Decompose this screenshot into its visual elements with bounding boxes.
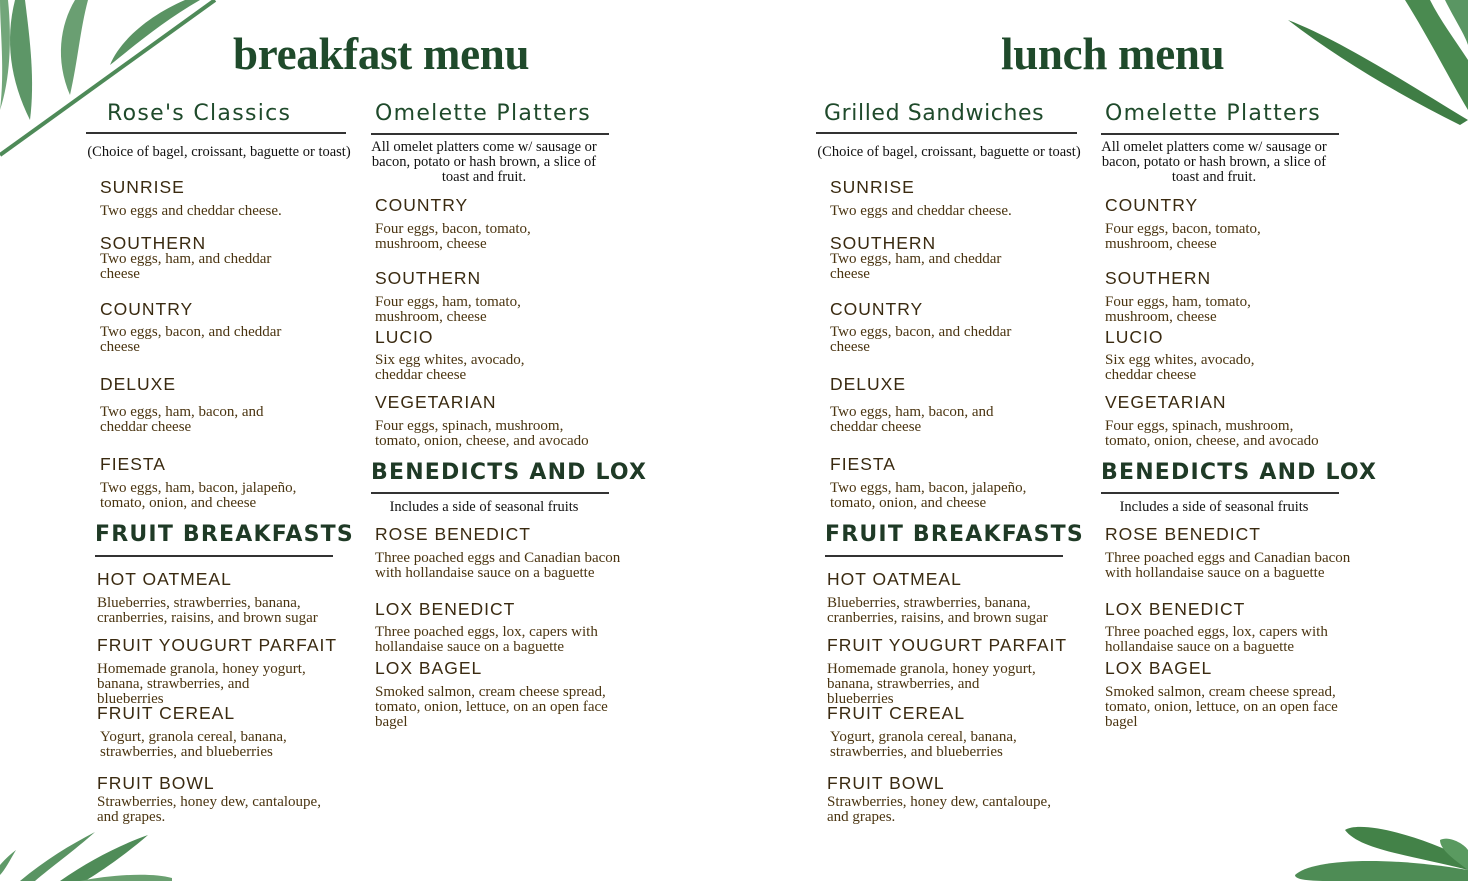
item: rose benedict: with hollandaise sauce on a baguette <box>375 565 595 581</box>
item: hot oatmeal: HOT OATMEAL <box>97 569 232 589</box>
item: rose benedict: Three poached eggs and Canadian bacon <box>1105 550 1350 566</box>
item: lox benedict <box>375 599 598 655</box>
item: deluxe: cheddar cheese <box>100 419 191 435</box>
item: southern: SOUTHERN <box>100 233 206 253</box>
item: southern: cheese <box>830 266 870 282</box>
item: country omelette: COUNTRY <box>1105 195 1198 215</box>
item: country omelette: Four eggs, bacon, tomato, <box>375 221 531 237</box>
item: lox bagel <box>1105 658 1338 730</box>
item: vegetarian <box>1105 392 1319 449</box>
item: deluxe: Two eggs, ham, bacon, and <box>830 404 994 420</box>
item: lox benedict: Three poached eggs, lox, capers with <box>375 624 598 640</box>
item: country omelette: mushroom, cheese <box>375 236 487 252</box>
item: fiesta: Two eggs, ham, bacon, jalapeño, <box>100 480 296 496</box>
text: omelet intro: All omelet platters come w/ sausage or <box>1101 139 1327 155</box>
item: southern omelette: SOUTHERN <box>375 268 481 288</box>
item: fruit bowl: and grapes. <box>97 809 165 825</box>
item: lox bagel: tomato, onion, lettuce, on an open face <box>375 699 608 715</box>
item: lox bagel: LOX BAGEL <box>1105 658 1212 678</box>
item: fruit yogurt parfait: blueberries <box>827 691 894 707</box>
item: sunrise: Two eggs and cheddar cheese. <box>100 203 282 219</box>
heading: benedicts and lox: BENEDICTS AND LOX <box>371 460 647 485</box>
item: lox bagel: bagel <box>375 714 407 730</box>
text: omelet intro: toast and fruit. <box>1172 169 1256 185</box>
decoration: top-left leaves <box>0 0 216 157</box>
item: lucio: cheddar cheese <box>1105 367 1196 383</box>
item: southern omelette: Four eggs, ham, tomato, <box>1105 294 1251 310</box>
decoration: bottom-left leaves <box>0 832 172 881</box>
heading: omelette platters: Omelette Platters <box>375 101 591 126</box>
item: lox benedict: Three poached eggs, lox, capers with <box>1105 624 1328 640</box>
item: lucio: LUCIO <box>1105 327 1163 347</box>
item: southern: cheese <box>100 266 140 282</box>
item: country omelette: COUNTRY <box>375 195 468 215</box>
item: rose benedict: with hollandaise sauce on a baguette <box>1105 565 1325 581</box>
item: rose benedict: ROSE BENEDICT <box>1105 524 1261 544</box>
text: omelet intro <box>1101 139 1327 185</box>
item: fruit bowl <box>97 773 321 825</box>
item: fruit bowl: FRUIT BOWL <box>827 773 945 793</box>
item: lucio <box>375 327 525 383</box>
item: southern omelette: Four eggs, ham, tomato, <box>375 294 521 310</box>
text: omelet intro: toast and fruit. <box>442 169 526 185</box>
item: country: Two eggs, bacon, and cheddar <box>830 324 1011 340</box>
page: lunch menu <box>816 29 1377 825</box>
item: fruit yogurt parfait: banana, strawberries, and <box>97 676 249 692</box>
item: fiesta <box>830 454 1026 511</box>
item: fiesta: tomato, onion, and cheese <box>830 495 986 511</box>
item: fruit yogurt parfait: FRUIT YOUGURT PARFAIT <box>827 635 1067 655</box>
item: fiesta: tomato, onion, and cheese <box>100 495 256 511</box>
item: country <box>830 299 1012 355</box>
item: southern: SOUTHERN <box>830 233 936 253</box>
item: lucio: LUCIO <box>375 327 433 347</box>
item: country: COUNTRY <box>830 299 923 319</box>
item: lox benedict: hollandaise sauce on a baguette <box>375 639 564 655</box>
text: omelet intro <box>371 139 597 185</box>
item: deluxe: Two eggs, ham, bacon, and <box>100 404 264 420</box>
item: country: Two eggs, bacon, and cheddar <box>100 324 281 340</box>
heading: Grilled Sandwiches: Grilled Sandwiches <box>824 101 1044 126</box>
heading: Rose's Classics: Rose's Classics <box>107 101 291 126</box>
item: country omelette <box>1105 195 1261 252</box>
item: deluxe: DELUXE <box>830 374 906 394</box>
item: rose benedict: ROSE BENEDICT <box>375 524 531 544</box>
item: fruit cereal: strawberries, and blueberries <box>830 744 1003 760</box>
item: fiesta: FIESTA <box>830 454 896 474</box>
item: fruit bowl <box>827 773 1051 825</box>
item: vegetarian: tomato, onion, cheese, and avocado <box>375 433 589 449</box>
item: country omelette <box>375 195 531 252</box>
item: southern omelette: SOUTHERN <box>1105 268 1211 288</box>
item: hot oatmeal: Blueberries, strawberries, banana, <box>827 595 1031 611</box>
item: southern: Two eggs, ham, and cheddar <box>100 251 271 267</box>
title: lunch menu: lunch menu <box>1001 29 1224 79</box>
item: vegetarian: VEGETARIAN <box>375 392 497 412</box>
item: fruit bowl: FRUIT BOWL <box>97 773 215 793</box>
item: fruit yogurt parfait: Homemade granola, honey yogurt, <box>97 661 306 677</box>
item: fruit cereal: strawberries, and blueberries <box>100 744 273 760</box>
item: fruit bowl: and grapes. <box>827 809 895 825</box>
item: rose benedict <box>1105 524 1350 581</box>
item: lox bagel: LOX BAGEL <box>375 658 482 678</box>
item: lucio <box>1105 327 1255 383</box>
heading: omelette platters: Omelette Platters <box>1105 101 1321 126</box>
item: vegetarian: Four eggs, spinach, mushroom, <box>1105 418 1293 434</box>
item: vegetarian: tomato, onion, cheese, and avocado <box>1105 433 1319 449</box>
item: fruit cereal: FRUIT CEREAL <box>97 703 235 723</box>
page: breakfast menu <box>86 29 647 825</box>
item: sunrise <box>100 177 282 219</box>
item: fruit yogurt parfait: blueberries <box>97 691 164 707</box>
item: fruit bowl: Strawberries, honey dew, cantaloupe, <box>97 794 321 810</box>
item: country: cheese <box>100 339 140 355</box>
item: fruit cereal: Yogurt, granola cereal, banana, <box>100 729 287 745</box>
item: southern <box>830 233 1002 282</box>
item: fruit yogurt parfait: Homemade granola, honey yogurt, <box>827 661 1036 677</box>
text: omelet intro: All omelet platters come w/ sausage or <box>371 139 597 155</box>
item: fruit cereal: FRUIT CEREAL <box>827 703 965 723</box>
item: country: cheese <box>830 339 870 355</box>
item: deluxe: cheddar cheese <box>830 419 921 435</box>
subtitle: choice of bread: (Choice of bagel, croissant, baguette or toast) <box>87 144 351 160</box>
item: lucio: cheddar cheese <box>375 367 466 383</box>
item: lucio: Six egg whites, avocado, <box>1105 352 1255 368</box>
item: southern omelette: mushroom, cheese <box>1105 309 1217 325</box>
item: fruit bowl: Strawberries, honey dew, cantaloupe, <box>827 794 1051 810</box>
item: hot oatmeal: HOT OATMEAL <box>827 569 962 589</box>
decoration: bottom-right leaves <box>1295 826 1468 881</box>
item: hot oatmeal: cranberries, raisins, and brown sugar <box>827 610 1048 626</box>
item: southern omelette: mushroom, cheese <box>375 309 487 325</box>
text: omelet intro: bacon, potato or hash brown, a slice of <box>1102 154 1326 170</box>
item: fruit cereal: Yogurt, granola cereal, banana, <box>830 729 1017 745</box>
item: deluxe: DELUXE <box>100 374 176 394</box>
item: lox bagel: bagel <box>1105 714 1137 730</box>
item: deluxe <box>830 374 994 435</box>
item: fruit yogurt parfait: banana, strawberries, and <box>827 676 979 692</box>
item: fruit cereal <box>827 703 1017 760</box>
item: southern omelette <box>375 268 521 325</box>
text: omelet intro: bacon, potato or hash brown, a slice of <box>372 154 596 170</box>
item: sunrise: Two eggs and cheddar cheese. <box>830 203 1012 219</box>
item: country omelette: Four eggs, bacon, tomato, <box>1105 221 1261 237</box>
item: lox benedict: hollandaise sauce on a baguette <box>1105 639 1294 655</box>
item: fruit cereal <box>97 703 287 760</box>
item: lox benedict: LOX BENEDICT <box>375 599 515 619</box>
item: hot oatmeal: Blueberries, strawberries, banana, <box>97 595 301 611</box>
heading: fruit breakfasts: FRUIT BREAKFASTS <box>825 522 1084 547</box>
item: fiesta: Two eggs, ham, bacon, jalapeño, <box>830 480 1026 496</box>
subtitle: seasonal fruits: Includes a side of seasonal fruits <box>1120 499 1308 515</box>
item: fiesta <box>100 454 296 511</box>
item: deluxe <box>100 374 264 435</box>
item: lox bagel: Smoked salmon, cream cheese spread, <box>375 684 606 700</box>
item: fruit yogurt parfait <box>827 635 1067 707</box>
title: breakfast menu: breakfast menu <box>233 29 529 79</box>
item: fiesta: FIESTA <box>100 454 166 474</box>
item: lox benedict <box>1105 599 1328 655</box>
item: rose benedict <box>375 524 620 581</box>
item: sunrise <box>830 177 1012 219</box>
item: southern omelette <box>1105 268 1251 325</box>
item: vegetarian <box>375 392 589 449</box>
item: lox bagel: tomato, onion, lettuce, on an open face <box>1105 699 1338 715</box>
item: lucio: Six egg whites, avocado, <box>375 352 525 368</box>
item: vegetarian: Four eggs, spinach, mushroom, <box>375 418 563 434</box>
subtitle: choice of bread: (Choice of bagel, croissant, baguette or toast) <box>817 144 1081 160</box>
item: fruit yogurt parfait <box>97 635 337 707</box>
item: lox bagel: Smoked salmon, cream cheese spread, <box>1105 684 1336 700</box>
item: sunrise: SUNRISE <box>830 177 915 197</box>
item: fruit yogurt parfait: FRUIT YOUGURT PARFAIT <box>97 635 337 655</box>
item: country <box>100 299 282 355</box>
heading: benedicts and lox: BENEDICTS AND LOX <box>1101 460 1377 485</box>
subtitle: seasonal fruits: Includes a side of seasonal fruits <box>390 499 578 515</box>
heading: fruit breakfasts: FRUIT BREAKFASTS <box>95 522 354 547</box>
item: rose benedict: Three poached eggs and Canadian bacon <box>375 550 620 566</box>
item: country omelette: mushroom, cheese <box>1105 236 1217 252</box>
item: lox benedict: LOX BENEDICT <box>1105 599 1245 619</box>
item: vegetarian: VEGETARIAN <box>1105 392 1227 412</box>
item: country: COUNTRY <box>100 299 193 319</box>
item: hot oatmeal <box>827 569 1048 626</box>
item: hot oatmeal: cranberries, raisins, and brown sugar <box>97 610 318 626</box>
item: southern: Two eggs, ham, and cheddar <box>830 251 1001 267</box>
item: southern <box>100 233 272 282</box>
decoration: top-right leaves <box>1288 0 1468 125</box>
item: hot oatmeal <box>97 569 318 626</box>
item: lox bagel <box>375 658 608 730</box>
item: sunrise: SUNRISE <box>100 177 185 197</box>
